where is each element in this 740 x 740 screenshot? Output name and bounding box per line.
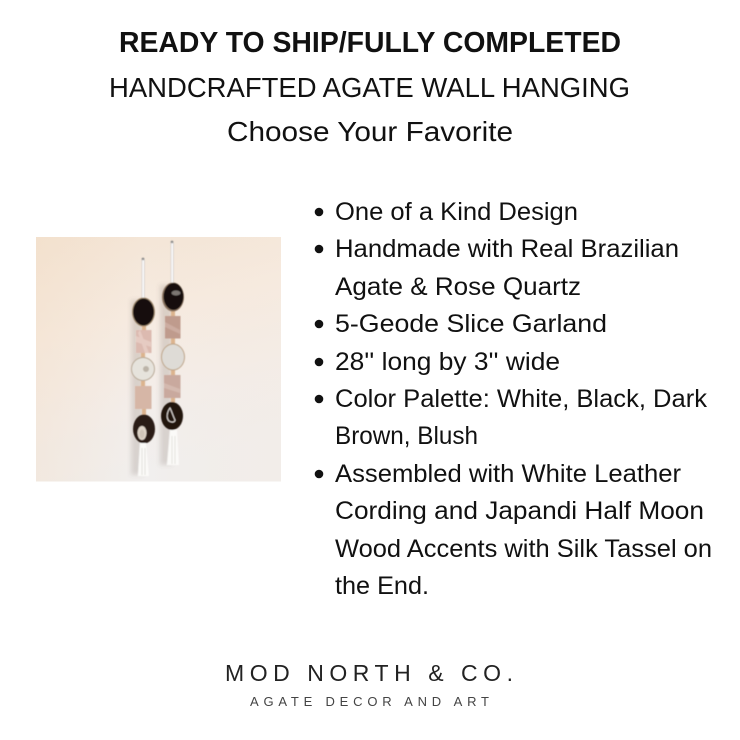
bullet: assembly: the End. bbox=[335, 572, 429, 600]
product photo: two agate wall hangings bbox=[36, 237, 281, 482]
feature list bbox=[315, 198, 712, 600]
right strand bbox=[161, 241, 185, 465]
bullet: materials bbox=[315, 235, 679, 301]
bullet: materials: Agate & Rose Quartz bbox=[335, 273, 581, 301]
bullet: assembly: Wood Accents with Silk Tassel on bbox=[335, 535, 712, 563]
bullet: assembly: Assembled with White Leather bbox=[335, 460, 681, 488]
bullet: assembly: Cording and Japandi Half Moon bbox=[335, 497, 704, 525]
bullet: materials: Handmade with Real Brazilian bbox=[335, 235, 679, 263]
bullet: color palette: Brown, Blush bbox=[335, 422, 478, 450]
left strand bbox=[131, 258, 155, 476]
bullet: size: 28'' long by 3'' wide bbox=[335, 348, 560, 376]
bullet: design: One of a Kind Design bbox=[335, 198, 578, 226]
subtitle: HANDCRAFTED AGATE WALL HANGING bbox=[109, 72, 630, 103]
bullet: color palette bbox=[315, 385, 708, 450]
title: READY TO SHIP/FULLY COMPLETED bbox=[119, 27, 621, 59]
tagline: Choose Your Favorite bbox=[227, 116, 513, 147]
bullet: color palette: Color Palette: White, Black, Dark bbox=[335, 385, 708, 413]
brand name: MOD NORTH & CO. bbox=[225, 660, 513, 686]
brand tagline: AGATE DECOR AND ART bbox=[250, 694, 489, 709]
bullet: assembly bbox=[315, 460, 712, 600]
bullet: garland: 5-Geode Slice Garland bbox=[335, 310, 607, 338]
shadows bbox=[131, 285, 172, 475]
